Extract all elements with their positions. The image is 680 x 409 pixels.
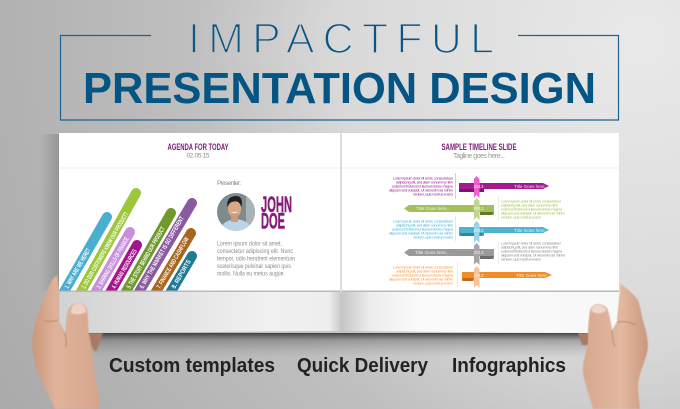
panel: agenda page: [59, 133, 340, 300]
timeline item 3: [389, 216, 549, 243]
timeline item 4: euismod tincidunt ut laoreet dolore magna: [501, 250, 563, 254]
timeline item 3: 2013: [474, 228, 484, 233]
timeline item 2: [404, 196, 565, 220]
right thumb nail: [591, 304, 606, 313]
timeline item 1: adipiscing elit, sed diam nonummy nibh: [396, 180, 453, 184]
timeline item 3: Lorem ipsum dolor sit amet, consectetuer: [393, 220, 454, 224]
timeline item 3: euismod tincidunt ut laoreet dolore magna: [392, 228, 454, 232]
timeline item 5: Lorem ipsum dolor sit amet, consectetuer: [393, 266, 454, 270]
timeline item 1: veniam, quis nostrud exerci: [413, 192, 453, 196]
timeline item 1: Title Goes here...: [514, 184, 548, 189]
timeline item 5: aliquam erat volutpat. Ut wisi enim ad minim: [389, 278, 453, 282]
timeline item 1: euismod tincidunt ut laoreet dolore magna: [392, 184, 454, 188]
timeline item 5: [389, 262, 552, 288]
left thumb crease: [44, 320, 66, 347]
left hand: [32, 275, 100, 409]
title: impactful: IMPACTFUL: [188, 15, 494, 63]
agenda bar labels: [64, 211, 193, 290]
timeline item 1: [389, 173, 549, 199]
right thumb crease: [612, 322, 636, 347]
presenter bio: scelerisque pulvinar sapien quis: [217, 263, 291, 270]
timeline item 3: Title Goes here...: [514, 228, 548, 233]
agenda bar labels: 2. DO OUR CUSTOMERS KNOW OUR PRODUCT?: [81, 211, 130, 290]
presenter photo: [216, 192, 256, 232]
timeline item 5: Title Goes here...: [516, 273, 550, 278]
presenter bio: tempor, odio hendrerit elementum: [217, 256, 295, 262]
timeline item 2: veniam, quis nostrud exerci: [501, 216, 541, 220]
agenda bar labels: 7. FINANCE AND CASHFLOW: [156, 236, 191, 290]
timeline item 4: veniam, quis nostrud exerci: [501, 258, 541, 262]
presenter label: Presenter:: [217, 180, 241, 187]
timeline item 1: 2013: [474, 184, 484, 189]
timeline heading: SAMPLE TIMELINE SLIDE: [442, 142, 516, 152]
timeline item 3: veniam, quis nostrud exerci: [413, 236, 453, 240]
agenda bar labels: 5. THE STORY BEHIND OUR PRODUCT: [126, 226, 167, 290]
timeline item 5: euismod tincidunt ut laoreet dolore magna: [392, 274, 454, 278]
presenter bio: consectetur adipiscing elit. Nunc: [217, 248, 293, 255]
fingers behind book: [86, 333, 590, 352]
timeline item 2: Lorem ipsum dolor sit amet, consectetuer: [501, 200, 562, 204]
presenter name: JOHN: [261, 192, 292, 217]
presenter name: [261, 192, 292, 234]
agenda bar labels: 1. WHY ARE WE HERE?: [64, 248, 92, 290]
timeline item 2: aliquam erat volutpat. Ut wisi enim ad minim: [501, 212, 565, 216]
title frame: [60, 36, 618, 120]
left thumb nail: [71, 304, 86, 314]
timeline item 5: veniam, quis nostrud exerci: [413, 282, 453, 286]
timeline item 4: [404, 241, 565, 265]
agenda bar labels: 4. HUMAN RESOURCES: [111, 248, 139, 290]
panel: timeline page: [340, 133, 619, 292]
feature: custom templates: Custom templates: [109, 355, 275, 377]
timeline item 3: adipiscing elit, sed diam nonummy nibh: [396, 224, 453, 228]
timeline tagline: Tagline goes here...: [453, 153, 505, 160]
feature: infographics: Infographics: [452, 355, 566, 377]
timeline item 4: Lorem ipsum dolor sit amet, consectetuer: [501, 242, 562, 246]
timeline item 2: Title Goes here...: [416, 206, 450, 211]
timeline item 5: adipiscing elit, sed diam nonummy nibh: [396, 270, 453, 274]
book shadow: [80, 333, 600, 358]
agenda heading: AGENDA FOR TODAY: [168, 142, 228, 152]
agenda bar labels: 6. WHY THE MARKET IS SO DIFFERENT: [139, 215, 186, 290]
timeline item 5: 2013: [474, 273, 484, 278]
timeline item 2: euismod tincidunt ut laoreet dolore magna: [501, 208, 563, 212]
timeline item 4: adipiscing elit, sed diam nonummy nibh: [501, 246, 558, 250]
book fold: right page: [341, 291, 620, 333]
timeline item 1: aliquam erat volutpat. Ut wisi enim ad minim: [389, 188, 453, 192]
page side shadow: [40, 134, 59, 291]
timeline item 2: adipiscing elit, sed diam nonummy nibh: [501, 204, 558, 208]
presenter name: DOE: [261, 208, 285, 234]
right hand: [583, 284, 648, 409]
timeline item 4: aliquam erat volutpat. Ut wisi enim ad minim: [501, 254, 565, 258]
book fold: left page: [59, 291, 340, 333]
timeline item 4: 2013: [474, 250, 484, 255]
timeline item 1: Lorem ipsum dolor sit amet, consectetuer: [393, 176, 454, 180]
presenter bio: mollis. Nulla eu metus augue.: [217, 270, 285, 278]
presenter bio: [217, 240, 295, 278]
presenter bio: Lorem ipsum dolor sit amet,: [217, 240, 282, 248]
timeline item 2: 2013: [474, 206, 484, 211]
timeline item 3: aliquam erat volutpat. Ut wisi enim ad minim: [389, 232, 453, 236]
feature: quick delivery: Quick Delivery: [297, 355, 429, 377]
title: presentation design: PRESENTATION DESIGN: [83, 64, 596, 113]
agenda bars: [59, 193, 192, 300]
timeline item 4: Title Goes here...: [415, 250, 449, 255]
agenda date: 02.05.15: [186, 152, 210, 160]
agenda bar labels: 8. REPORTS: [171, 258, 193, 290]
agenda bar labels: 3. SHARING SKILLS OF FINANCE: [96, 236, 131, 290]
